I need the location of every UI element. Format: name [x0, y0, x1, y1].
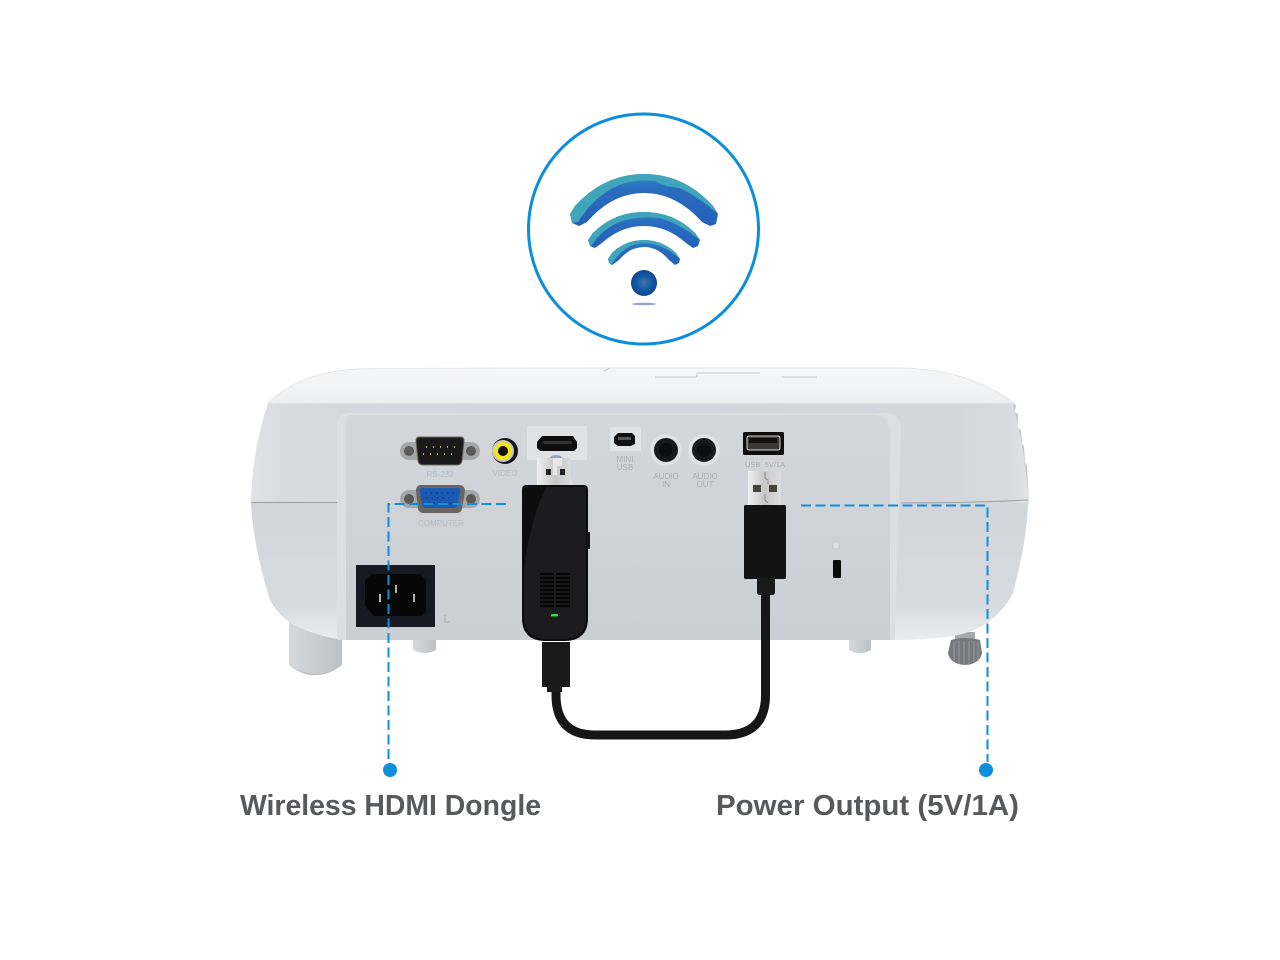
label: audio out: OUT	[697, 480, 714, 489]
connector: video RCA	[492, 438, 518, 478]
connector: security lock	[833, 541, 841, 578]
foot: adjustable knob	[948, 632, 982, 665]
connector: audio out	[688, 434, 720, 489]
wifi badge	[528, 114, 758, 344]
label: power output: Power Output (5V/1A)	[716, 790, 1019, 822]
callout line: power output	[801, 506, 988, 762]
dongle highlight	[524, 487, 586, 639]
projector lid	[268, 368, 1013, 403]
power inlet	[356, 565, 450, 627]
callout line: wireless HDMI dongle	[388, 504, 506, 762]
dongle LED	[551, 614, 558, 616]
USB metal tip	[748, 471, 781, 506]
connector: RS-232	[400, 437, 480, 479]
lid detail	[604, 368, 817, 377]
badge circle	[528, 114, 758, 344]
connector: mini USB	[610, 427, 641, 472]
projector lower body	[251, 503, 1028, 640]
connector: VGA computer	[400, 485, 480, 528]
foot: small left	[413, 638, 436, 653]
callout dot: wireless HDMI dongle	[383, 763, 397, 777]
label: COMPUTER: COMPUTER	[418, 519, 464, 528]
foot: small right	[849, 638, 871, 653]
wifi inner arc	[608, 240, 680, 265]
dongle side button	[587, 532, 590, 549]
wifi outer arc	[570, 174, 718, 226]
projector	[251, 368, 1029, 675]
cable	[556, 590, 766, 735]
dongle body	[522, 485, 588, 641]
connector: audio in	[650, 434, 682, 489]
callout dot: power output	[979, 763, 993, 777]
connector: USB port	[743, 432, 785, 469]
body seam	[251, 500, 1028, 503]
foot: left	[289, 615, 342, 675]
label: wireless HDMI dongle: Wireless HDMI Dongle	[240, 790, 541, 822]
label: mini USB: MINI	[617, 455, 633, 464]
dongle cable plug	[542, 642, 570, 692]
label: audio out: AUDIO	[692, 472, 718, 481]
label: VIDEO: VIDEO	[493, 469, 517, 478]
wifi middle arc	[588, 212, 700, 248]
connector: HDMI port	[527, 426, 587, 461]
wifi dot	[631, 270, 657, 296]
label: audio in: AUDIO	[653, 472, 679, 481]
right side vents	[1010, 403, 1029, 503]
label: RS-232: RS-232	[426, 470, 454, 479]
label: mini USB: USB	[617, 463, 633, 472]
USB power plug	[744, 471, 786, 595]
wireless HDMI dongle	[522, 458, 590, 692]
back panel	[337, 413, 901, 640]
USB plug body	[744, 505, 786, 579]
dongle HDMI plug	[537, 458, 573, 485]
dongle vent grill	[540, 574, 570, 606]
label: USB 5V/1A: USB 5V/1A	[745, 460, 785, 469]
USB plug neck	[757, 578, 775, 595]
projector upper body	[251, 403, 1029, 503]
wifi dot shadow	[632, 303, 656, 305]
icon: wifi signal	[570, 174, 718, 305]
label: audio in: IN	[662, 480, 670, 489]
